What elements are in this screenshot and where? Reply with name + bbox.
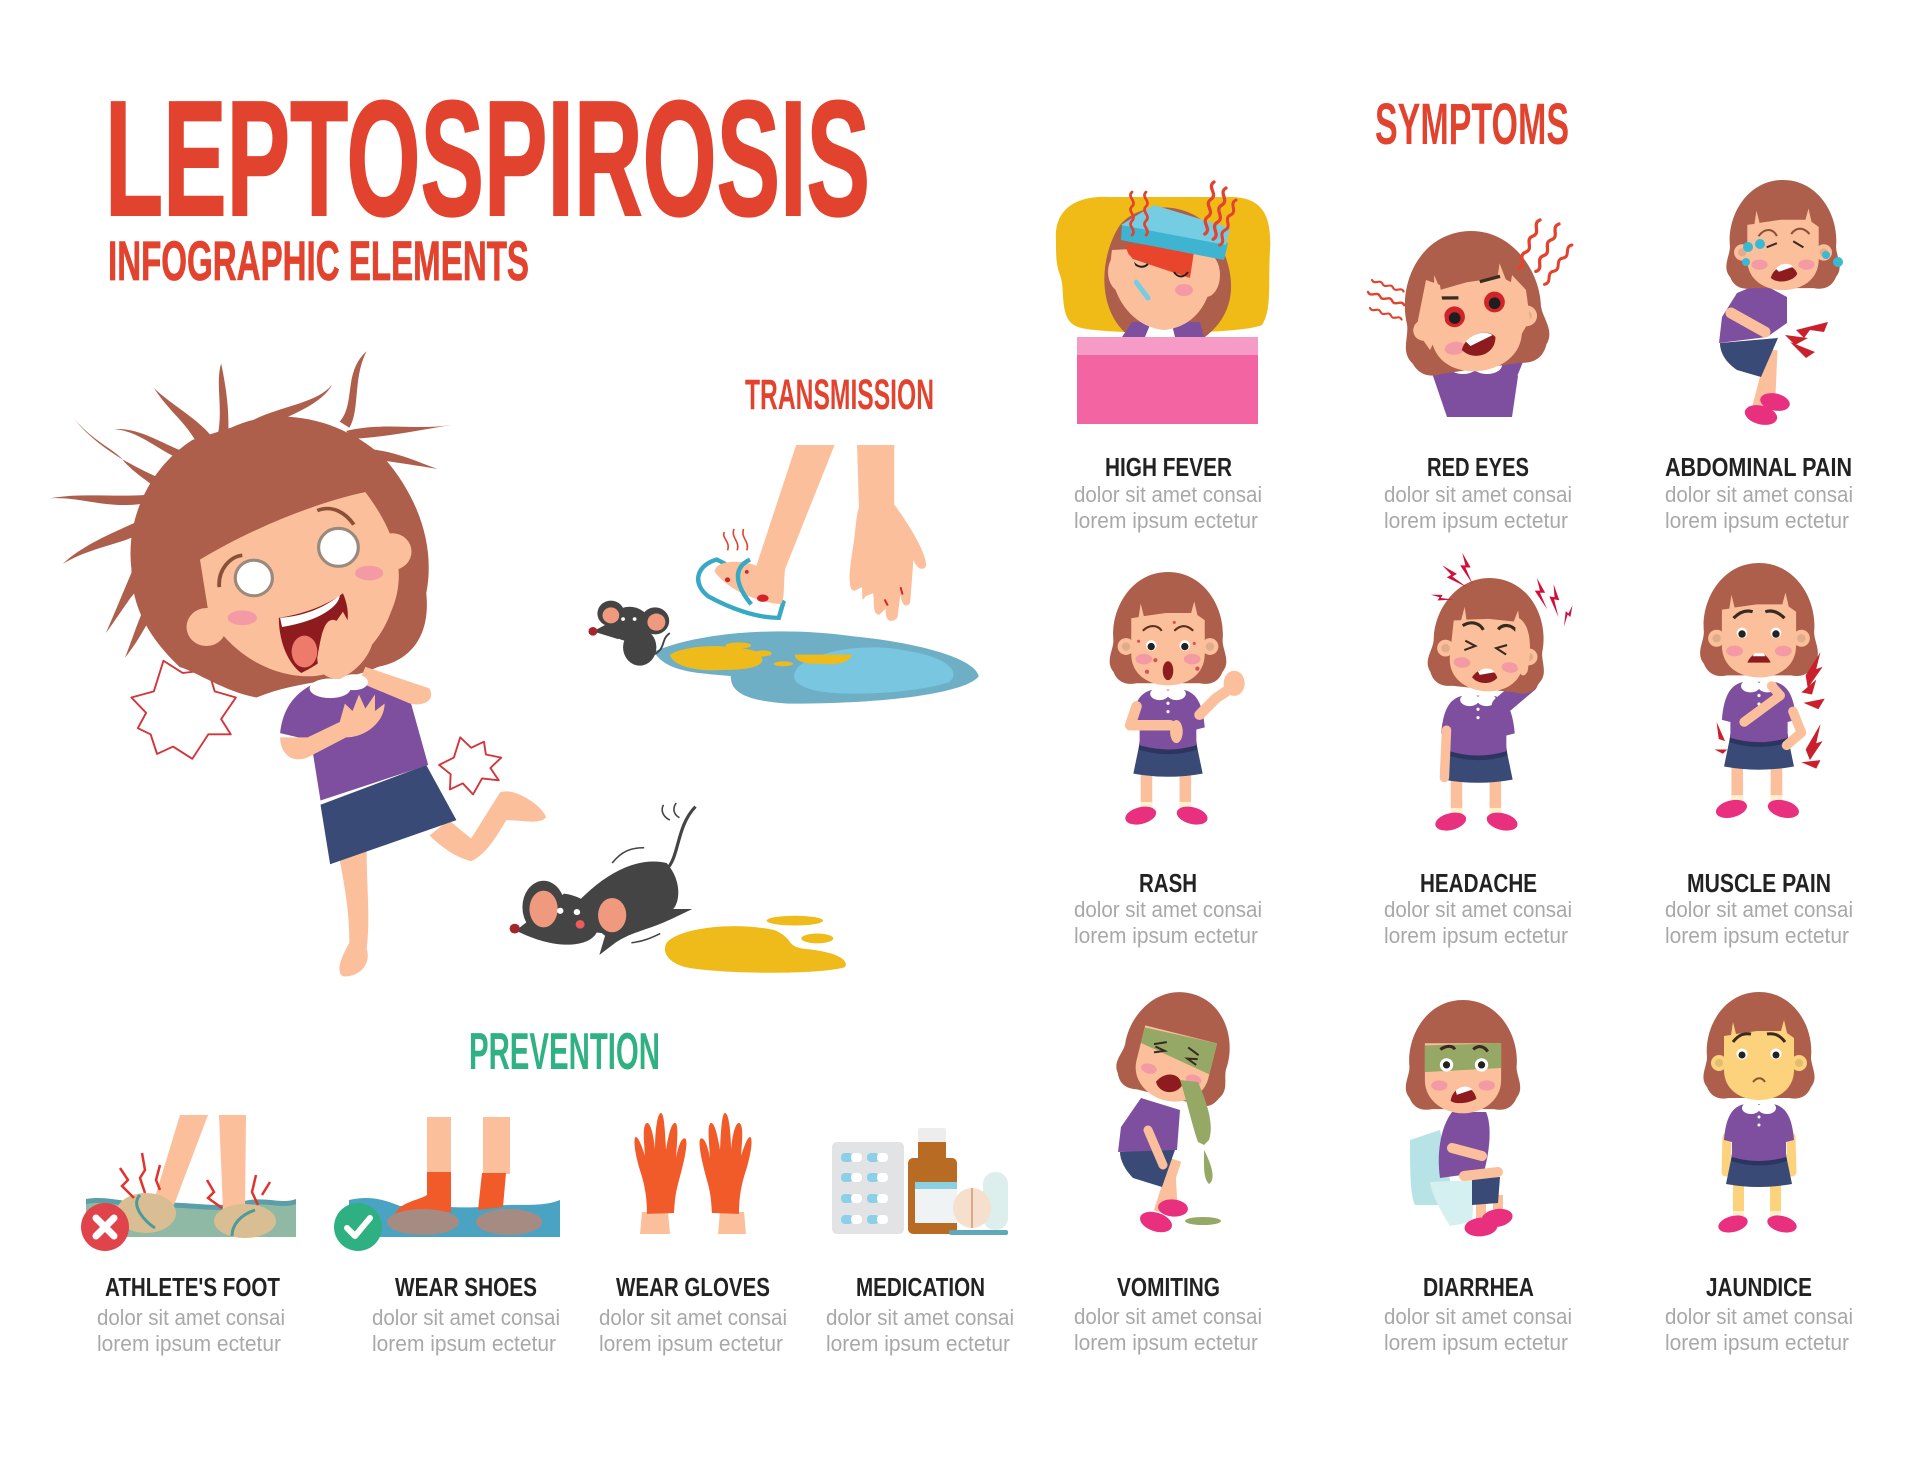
label: wear shoes: lorem ipsum ectetur: [372, 1331, 556, 1356]
label: diarrhea: [1384, 1272, 1572, 1355]
label: athlete's foot: ATHLETE'S FOOT: [105, 1272, 280, 1302]
label: red eyes: lorem ipsum ectetur: [1384, 508, 1568, 533]
head: [1111, 980, 1245, 1114]
symptom: muscle pain: [1700, 563, 1825, 821]
mud: [387, 1209, 542, 1235]
flip-flop sole: [698, 560, 783, 618]
shirt: [280, 676, 428, 801]
hands: [1416, 275, 1530, 350]
leg and arm: [1452, 1148, 1498, 1176]
head: [1726, 180, 1840, 290]
tears: [1742, 239, 1843, 267]
legs and hand: [715, 445, 926, 621]
skirt: [1720, 338, 1778, 377]
body: [1724, 1102, 1794, 1187]
label: wear gloves: dolor sit amet consai: [599, 1305, 787, 1330]
label: red eyes: [1384, 452, 1572, 533]
pain bolts: [1430, 553, 1578, 627]
label: headache: HEADACHE: [1420, 868, 1537, 898]
heading: symptoms: SYMPTOMS: [1375, 92, 1569, 157]
check badge: [334, 1203, 382, 1251]
label: wear shoes: WEAR SHOES: [395, 1272, 537, 1302]
label: abdominal pain: dolor sit amet consai: [1665, 482, 1853, 507]
prevention: athlete's foot: [81, 1115, 296, 1251]
heading: prevention: PREVENTION: [469, 1023, 660, 1081]
boots: [395, 1172, 506, 1214]
label: jaundice: [1665, 1272, 1853, 1355]
legs: [1714, 764, 1801, 821]
label: medication: lorem ipsum ectetur: [826, 1331, 1010, 1356]
label: rash: dolor sit amet consai: [1074, 897, 1262, 922]
face: [187, 492, 412, 676]
label: wear shoes: dolor sit amet consai: [372, 1305, 560, 1330]
label: vomiting: lorem ipsum ectetur: [1074, 1330, 1258, 1355]
legs: [339, 791, 546, 977]
label: jaundice: lorem ipsum ectetur: [1665, 1330, 1849, 1355]
label: athlete's foot: lorem ipsum ectetur: [97, 1331, 281, 1356]
subtitle: INFOGRAPHIC ELEMENTS: [108, 229, 529, 292]
symptom: vomiting: [1111, 980, 1245, 1236]
capsule bottle: [983, 1172, 1008, 1230]
label: rash: lorem ipsum ectetur: [1074, 923, 1258, 948]
arms: [1444, 683, 1528, 778]
head: [1406, 1000, 1520, 1113]
head: [1700, 563, 1818, 677]
skirt: [1472, 1177, 1500, 1205]
main girl illustration: [50, 351, 546, 977]
body: [1131, 688, 1205, 777]
label: wear gloves: [599, 1272, 787, 1356]
head: [1703, 992, 1815, 1100]
body: [1441, 694, 1515, 783]
hair and face: [1104, 207, 1231, 337]
transmission illustration: [510, 445, 979, 973]
legs and shoes: [1743, 350, 1791, 428]
title: LEPTOSPIROSIS: [105, 67, 870, 250]
label: jaundice: JAUNDICE: [1706, 1272, 1812, 1302]
label: wear gloves: lorem ipsum ectetur: [599, 1331, 783, 1356]
label: abdominal pain: [1665, 452, 1853, 533]
strap and sores: [724, 529, 903, 606]
arms: [1130, 690, 1229, 725]
thermometer: [1136, 282, 1148, 298]
label: muscle pain: [1665, 868, 1853, 948]
shirt: [1439, 1112, 1490, 1178]
collar: [310, 674, 368, 698]
hand: [1170, 671, 1245, 743]
arms: [1726, 1137, 1792, 1172]
legs: [155, 1115, 246, 1210]
cold pack: [1121, 205, 1230, 260]
label: red eyes: RED EYES: [1427, 452, 1529, 482]
label: athlete's foot: dolor sit amet consai: [97, 1305, 285, 1330]
infected feet: [116, 1193, 276, 1238]
blanket: [1077, 337, 1258, 424]
bottle: [908, 1128, 957, 1234]
vomit stream: [1180, 1080, 1221, 1225]
prevention: wear shoes: [334, 1117, 560, 1251]
pain bolts: [1785, 322, 1828, 358]
legs: [1123, 772, 1209, 828]
head: [1110, 572, 1226, 685]
hands: [1108, 252, 1220, 297]
wrists: [640, 1212, 746, 1234]
arm: [1731, 313, 1765, 332]
arm: [1148, 1130, 1163, 1165]
symptom: abdominal pain: [1719, 180, 1843, 428]
label: headache: dolor sit amet consai: [1384, 897, 1572, 922]
label: medication: dolor sit amet consai: [826, 1305, 1014, 1330]
tray: [949, 1230, 1008, 1235]
label: muscle pain: MUSCLE PAIN: [1687, 868, 1831, 898]
prevention: wear gloves: [634, 1113, 752, 1234]
shirt and arms: [1432, 350, 1518, 417]
label: medication: MEDICATION: [856, 1272, 985, 1302]
transmission heading: TRANSMISSION: [745, 371, 934, 419]
heat lines: [1368, 219, 1573, 321]
hand at mouth: [317, 612, 373, 679]
cheeks and brows: [219, 509, 383, 625]
legs: [427, 1117, 510, 1174]
water: [349, 1198, 560, 1237]
legs: [1717, 1182, 1798, 1235]
label: muscle pain: lorem ipsum ectetur: [1665, 923, 1849, 948]
label: athlete's foot: [97, 1272, 285, 1356]
label: vomiting: VOMITING: [1117, 1272, 1220, 1302]
legs: [1433, 778, 1519, 834]
legs and shoes: [1137, 1160, 1189, 1236]
eyes: [235, 528, 358, 596]
prevention: medication: [832, 1128, 1008, 1235]
small rat: [588, 601, 670, 666]
big rat: [510, 803, 695, 955]
arms: [1744, 686, 1801, 745]
label: high fever: dolor sit amet consai: [1074, 482, 1262, 507]
label: diarrhea: DIARRHEA: [1423, 1272, 1534, 1302]
tablet: [953, 1188, 991, 1228]
gloves: [634, 1113, 752, 1214]
label: rash: RASH: [1139, 868, 1197, 898]
symptom: jaundice: [1703, 992, 1815, 1235]
label: muscle pain: dolor sit amet consai: [1665, 897, 1853, 922]
yellow puddle: [665, 916, 846, 973]
label: wear gloves: WEAR GLOVES: [616, 1272, 770, 1302]
blister pack: [832, 1142, 904, 1234]
shirt: [1719, 283, 1787, 343]
mouth: [279, 593, 348, 673]
label: high fever: lorem ipsum ectetur: [1074, 508, 1258, 533]
label: high fever: [1074, 452, 1262, 533]
label: vomiting: dolor sit amet consai: [1074, 1304, 1262, 1329]
label: abdominal pain: ABDOMINAL PAIN: [1665, 452, 1852, 482]
shirt: [1118, 1098, 1180, 1152]
starbursts: [131, 661, 501, 794]
skirt: [1120, 1147, 1176, 1187]
label: diarrhea: lorem ipsum ectetur: [1384, 1330, 1568, 1355]
label: rash: [1074, 868, 1262, 948]
skirt: [321, 765, 456, 864]
label: red eyes: dolor sit amet consai: [1384, 482, 1572, 507]
head: [1425, 572, 1553, 697]
dirty water: [86, 1198, 296, 1237]
head: [1391, 222, 1553, 381]
label: headache: [1384, 868, 1572, 948]
symptom: headache: [1425, 553, 1578, 834]
shoes: [1464, 1195, 1514, 1238]
label: wear shoes: [372, 1272, 560, 1356]
arms: [280, 667, 431, 759]
symptom: high fever: [1056, 182, 1270, 424]
pillow: [1056, 197, 1270, 333]
label: high fever: HIGH FEVER: [1105, 452, 1232, 482]
symptom: diarrhea: [1406, 1000, 1520, 1238]
cross badge: [81, 1203, 129, 1251]
label: jaundice: dolor sit amet consai: [1665, 1304, 1853, 1329]
label: diarrhea: dolor sit amet consai: [1384, 1304, 1572, 1329]
label: headache: lorem ipsum ectetur: [1384, 923, 1568, 948]
heat lines: [120, 1153, 270, 1208]
label: abdominal pain: lorem ipsum ectetur: [1665, 508, 1849, 533]
body: [1722, 680, 1796, 770]
puddle: [654, 631, 979, 704]
hair: [50, 351, 452, 698]
toilet: [1410, 1130, 1475, 1226]
label: vomiting: [1074, 1272, 1262, 1355]
label: medication: [826, 1272, 1014, 1356]
symptom: red eyes: [1368, 219, 1573, 417]
symptom: rash: [1110, 572, 1245, 828]
pain bolts: [1714, 652, 1825, 769]
heat lines: [1130, 182, 1238, 246]
